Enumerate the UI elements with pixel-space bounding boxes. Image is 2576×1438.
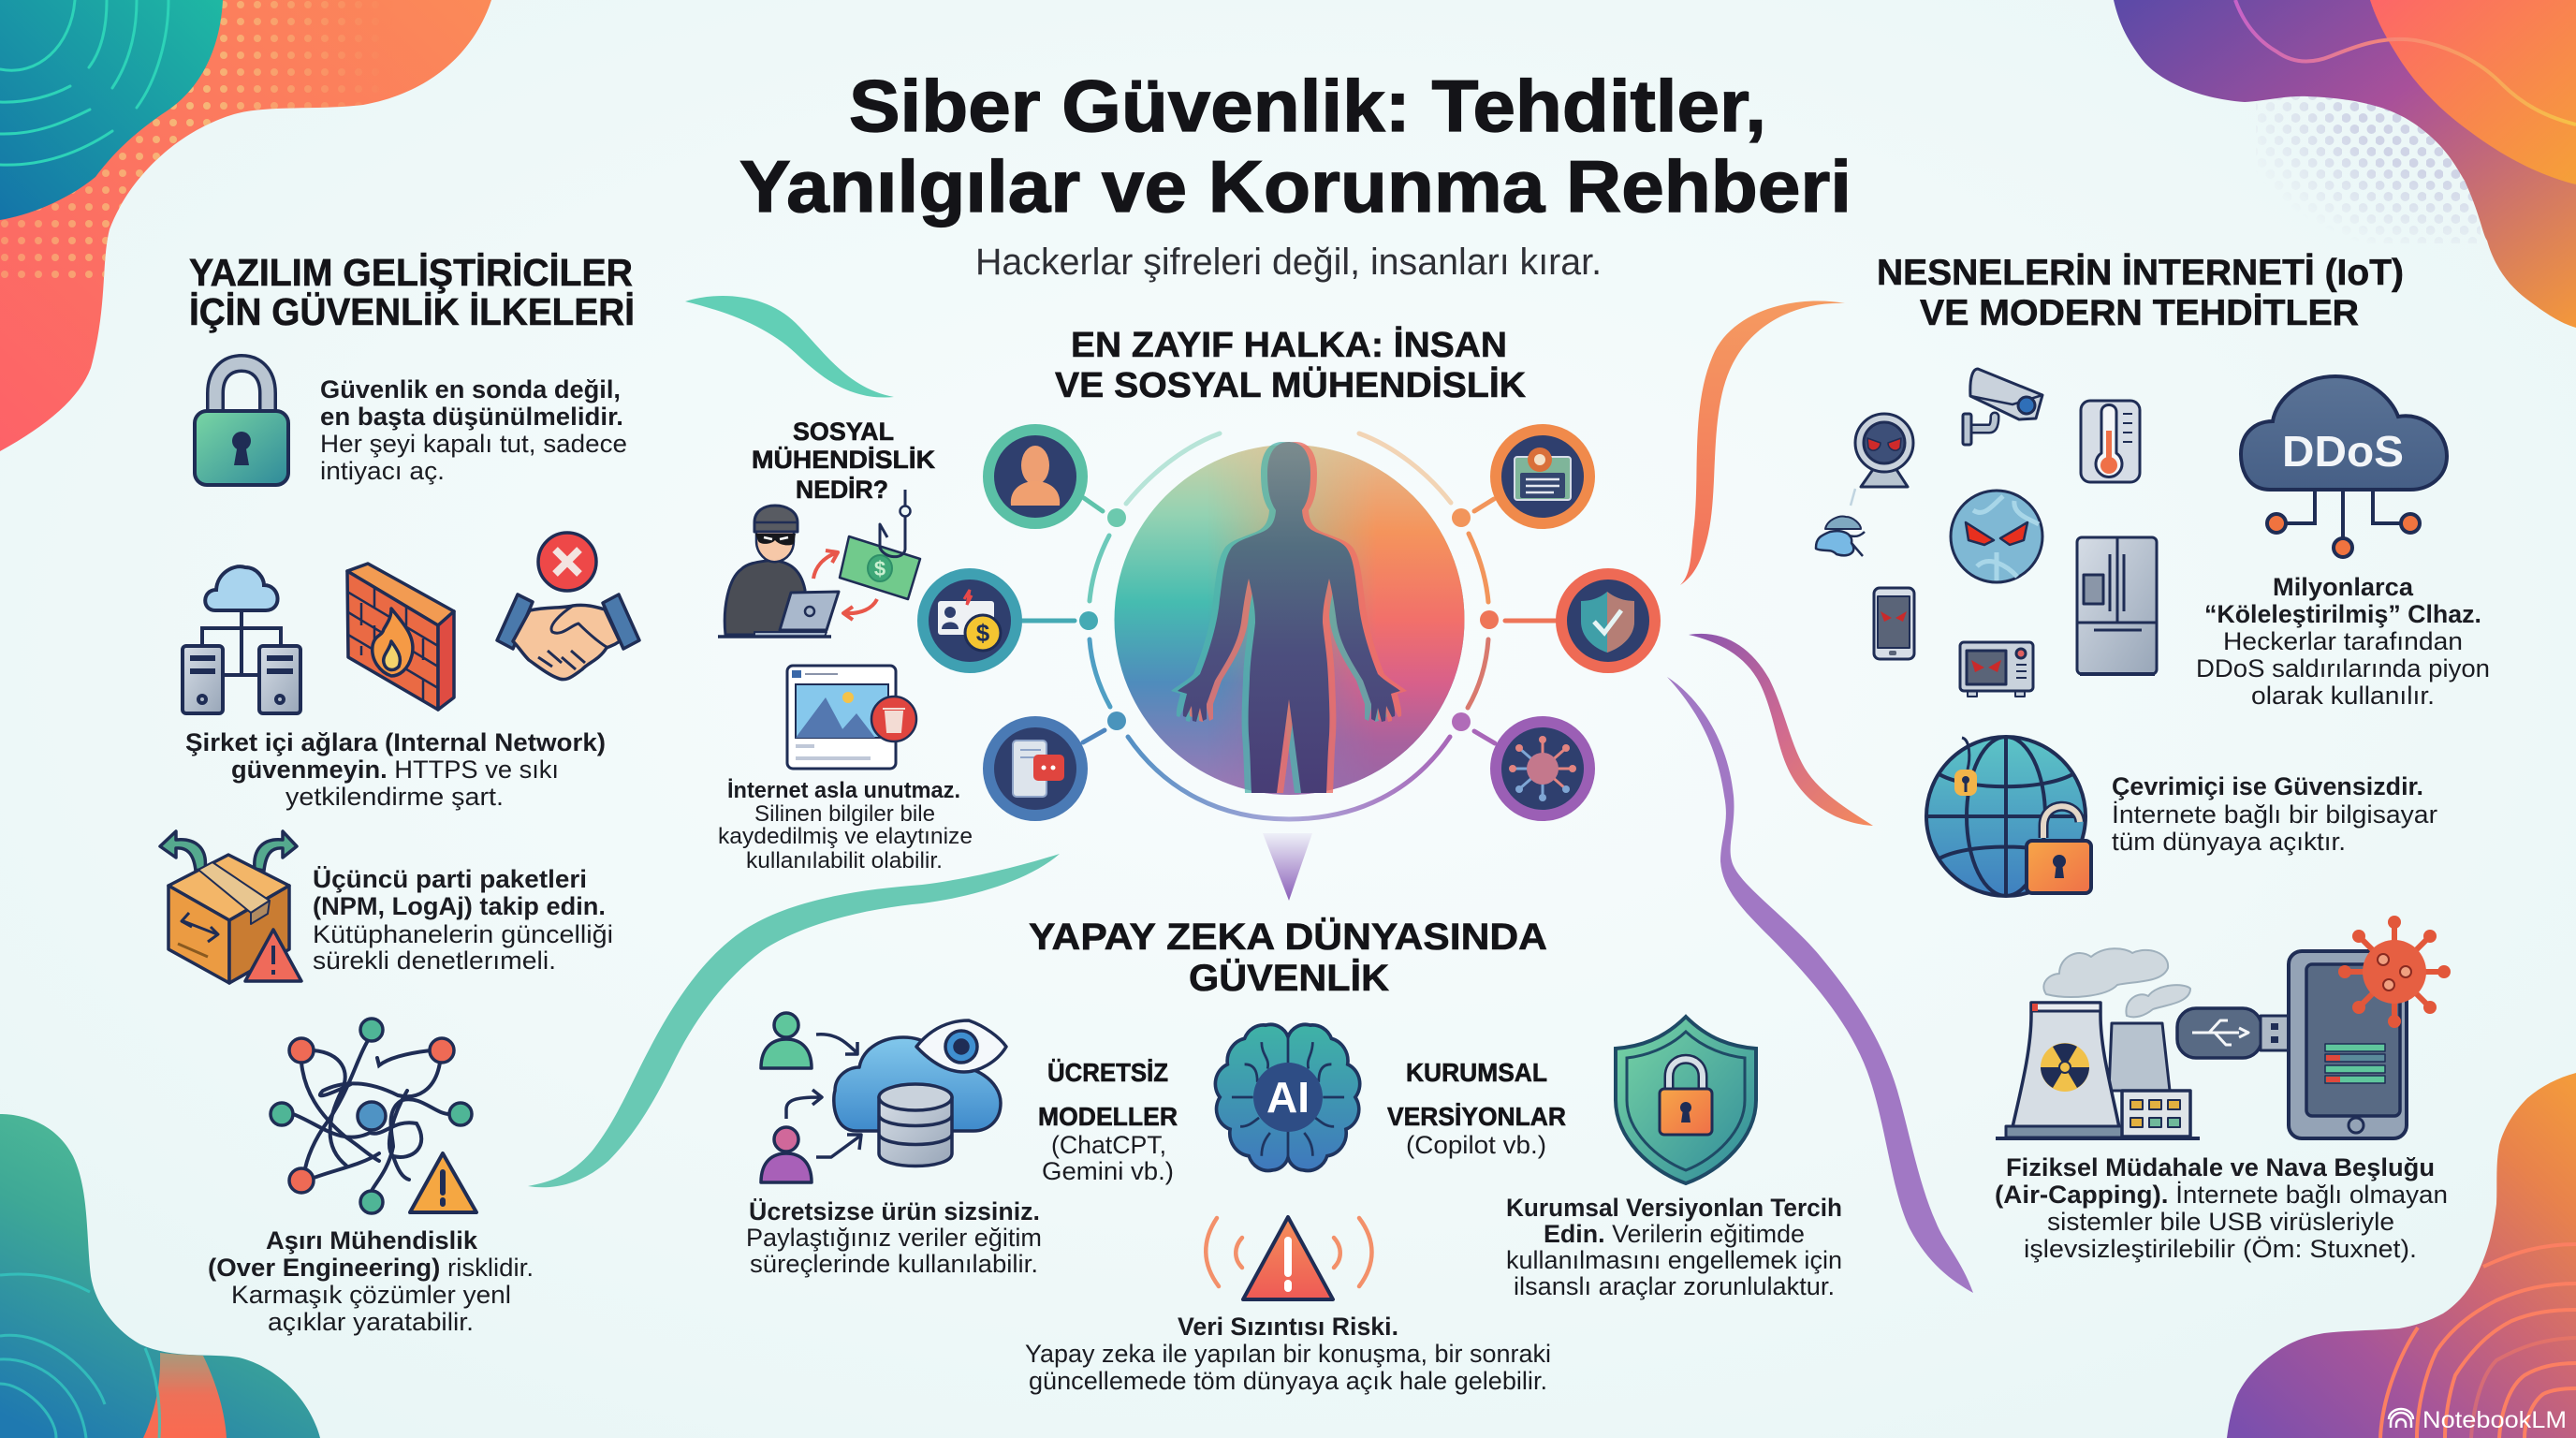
text: internal network: Şirket içi ağlara (Internal Network): [185, 728, 606, 756]
heading: developers: YAZILIM GELİŞTİRİCİLER: [189, 251, 633, 294]
flow ribbon: purple long: [1667, 677, 1973, 1293]
text: internet never forgets: İnternet asla unutmaz.: [727, 778, 960, 803]
heading: what is social engineering: [752, 418, 936, 504]
icon: shield check: [1561, 574, 1655, 668]
text: over engineering: [208, 1226, 534, 1336]
label: free models: [1038, 1058, 1178, 1185]
icon: id card and coin: $: [976, 619, 990, 647]
text: data leak risk: Veri Sızıntısı Riski.: [1178, 1313, 1398, 1341]
flow ribbon: purple to orange: [1689, 634, 1873, 826]
panel: developer security principles: [160, 251, 639, 1336]
text: free means you are the product: Ücretsizse ürün sizsiniz.: [749, 1197, 1040, 1225]
label: free models: (ChatCPT,: [1051, 1131, 1166, 1159]
icon: firewall: [347, 564, 454, 710]
panel: IoT and modern threats: [1816, 253, 2490, 1263]
panel: AI security: [746, 916, 1842, 1395]
icon: DDoS cloud: [2241, 376, 2447, 557]
text: over engineering: açıklar yaratabilir.: [268, 1308, 474, 1336]
ring around central figure: [1090, 433, 1488, 819]
text: online means insecure: İnternete bağlı bir bilgisayar: [2112, 800, 2437, 829]
text: free means you are the product: Paylaştığınız veriler eğitim: [746, 1224, 1042, 1252]
icon: broken trust handshake: [497, 533, 639, 680]
broken cloud: [1816, 489, 1865, 556]
title: Siber Güvenlik: Tehditler,: [849, 65, 1766, 147]
text: data leak risk: güncellemede töm dünyaya açık hale gelebilir.: [1029, 1367, 1547, 1395]
flow ribbon: teal bottom: [528, 854, 1060, 1187]
icon: user badge: [988, 430, 1082, 523]
heading: IoT: [1877, 253, 2404, 333]
corner blob: bottom right: [2227, 1073, 2576, 1438]
text: prefer enterprise versions: kullanılmasını engellemek için: [1506, 1246, 1842, 1274]
text: enslaved devices: “Köleleştirilmiş” Clhaz.: [2204, 600, 2481, 628]
icon: users, cloud data and eye: [761, 1013, 1006, 1182]
text: internal network: [185, 728, 606, 811]
subtitle: Hackerlar şifreleri değil, insanları kırar.: [975, 242, 1602, 283]
heading: weakest link: VE SOSYAL MÜHENDİSLİK: [1055, 365, 1527, 405]
heading: what is social engineering: MÜHENDİSLİK: [752, 446, 936, 474]
text: prefer enterprise versions: ilsanslı araçlar zorunlulaktur.: [1514, 1272, 1835, 1300]
text: internal network: yetkilendirme şart.: [285, 783, 504, 811]
text: internet never forgets: Silinen bilgiler bile: [754, 801, 935, 827]
heading: AI security: [1029, 916, 1547, 999]
central figure: human in gradient circle: [1114, 442, 1464, 795]
NotebookLM logo: NotebookLM: [2422, 1407, 2567, 1433]
text: online means insecure: [2112, 772, 2437, 856]
icon: id card and coin: [923, 574, 1017, 668]
icon: identity document: [1496, 430, 1589, 523]
thermostat: [2081, 401, 2140, 482]
flow ribbon: orange: [1680, 301, 1845, 585]
text: shift left security: intiyacı aç.: [320, 457, 445, 485]
label: free models: MODELLER: [1038, 1102, 1178, 1131]
text: enslaved devices: DDoS saldırılarında piyon: [2196, 654, 2490, 682]
panel: weakest link human: [718, 326, 1655, 901]
text: internet never forgets: [718, 778, 973, 873]
text: air gap: işlevsizleştirilebilir (Öm: Stuxnet).: [2024, 1235, 2417, 1263]
text: internet never forgets: kaydedilmiş ve elaytınize: [718, 824, 973, 849]
icon: AI brain: AI: [1266, 1073, 1310, 1122]
icon: nuclear plant, USB and infected device: [1996, 916, 2451, 1138]
text: air gap: [1995, 1153, 2448, 1263]
text: data leak risk: Yapay zeka ile yapılan bir konuşma, bir sonraki: [1025, 1340, 1551, 1368]
heading: AI security: GÜVENLİK: [1189, 957, 1389, 999]
label: free models: ÜCRETSİZ: [1047, 1058, 1168, 1087]
text: free means you are the product: süreçlerinde kullanılabilir.: [750, 1250, 1038, 1278]
text: shift left security: [320, 375, 627, 485]
text: air gap: sistemler bile USB virüsleriyle: [2047, 1208, 2394, 1236]
infected microwave: [1960, 642, 2033, 697]
text: data leak risk: [1025, 1313, 1551, 1395]
text: internet never forgets: kullanılabilit olabilir.: [746, 848, 943, 873]
corner blob: top left: [0, 0, 491, 451]
label: free models: Gemini vb.): [1042, 1157, 1174, 1185]
icon: data leak warning: [1206, 1217, 1372, 1299]
heading: IoT: VE MODERN TEHDİTLER: [1920, 293, 2359, 333]
infected phone: [1874, 588, 1914, 659]
icon: virus badge: [1496, 722, 1589, 815]
text: over engineering: Karmaşık çözümler yenl: [231, 1281, 511, 1309]
text: shift left security: Her şeyi kapalı tut, sadece: [320, 430, 627, 458]
arrow pointing to AI section: [1263, 833, 1312, 901]
title: [739, 65, 1852, 227]
heading: AI security: YAPAY ZEKA DÜNYASINDA: [1029, 916, 1547, 958]
text: third party packages: (NPM, LogAj) takip edin.: [313, 892, 606, 920]
evil globe: [1951, 491, 2042, 582]
heading: IoT: NESNELERİN İNTERNETİ (IoT): [1877, 253, 2404, 293]
text: enslaved devices: Heckerlar tarafından: [2223, 627, 2463, 655]
heading: what is social engineering: NEDİR?: [796, 476, 888, 504]
text: prefer enterprise versions: Kurumsal Versiyonlan Tercih: [1506, 1194, 1842, 1222]
text: free means you are the product: [746, 1197, 1042, 1278]
heading: what is social engineering: SOSYAL: [793, 418, 894, 446]
text: enslaved devices: [2196, 573, 2490, 710]
title: Yanılgılar ve Korunma Rehberi: [739, 145, 1852, 227]
text: enslaved devices: Milyonlarca: [2273, 573, 2414, 601]
text: internal network: güvenmeyin. HTTPS ve sıkı: [231, 756, 559, 784]
icon: hacked IoT devices: [1816, 369, 2157, 697]
icon: cloud and servers: [183, 566, 300, 713]
icon: hacker phishing with money: $: [874, 557, 886, 580]
text: third party packages: [313, 865, 613, 975]
text: shift left security: en başta düşünülmelidir.: [320, 403, 623, 431]
webcam: [1855, 414, 1913, 487]
corner blob: top right: [2114, 0, 2576, 328]
icon: globe with open padlock: [1926, 737, 2091, 896]
text: online means insecure: tüm dünyaya açıktır.: [2112, 828, 2346, 856]
heading: developers: [189, 251, 635, 333]
icon: shield with padlock: [1616, 1017, 1756, 1183]
text: over engineering: (Over Engineering) risklidir.: [208, 1254, 534, 1282]
text: online means insecure: Çevrimiçi ise Güvensizdir.: [2112, 772, 2423, 800]
text: air gap: Fiziksel Müdahale ve Nava Beşluğu: [2006, 1153, 2435, 1181]
icon: social post with trash: [787, 666, 916, 769]
text: prefer enterprise versions: Edin. Verilerin eğitimde: [1544, 1220, 1805, 1248]
heading: developers: İÇİN GÜVENLİK İLKELERİ: [189, 290, 635, 333]
label: enterprise versions: VERSİYONLAR: [1387, 1102, 1566, 1131]
icon: package with warning: [160, 831, 301, 983]
icon: phone message: [988, 722, 1082, 815]
text: shift left security: Güvenlik en sonda değil,: [320, 375, 621, 404]
icon: tangled network with warning: [271, 1019, 476, 1213]
corner blob: bottom left: [0, 1114, 320, 1438]
heading: weakest link: EN ZAYIF HALKA: İNSAN: [1071, 326, 1507, 365]
text: over engineering: Aşırı Mühendislik: [266, 1226, 478, 1255]
smart fridge: [2077, 537, 2157, 674]
icon: DDoS cloud: DDoS: [2282, 427, 2404, 476]
text: air gap: (Air-Capping). İnternete bağlı olmayan: [1995, 1180, 2448, 1209]
flow ribbon: teal top: [685, 296, 894, 397]
text: third party packages: sürekli denetlerımeli.: [313, 946, 556, 975]
heading: weakest link: [1055, 326, 1527, 405]
label: enterprise versions: [1387, 1058, 1566, 1159]
security camera: [1963, 369, 2042, 445]
text: prefer enterprise versions: [1506, 1194, 1842, 1300]
label: enterprise versions: (Copilot vb.): [1406, 1131, 1546, 1159]
label: enterprise versions: KURUMSAL: [1406, 1058, 1547, 1087]
text: third party packages: Kütüphanelerin güncelliği: [313, 920, 613, 948]
connector nodes: [1022, 498, 1558, 743]
text: third party packages: Üçüncü parti paketleri: [313, 865, 587, 893]
icon: green padlock: [195, 363, 288, 485]
text: enslaved devices: olarak kullanılır.: [2251, 682, 2435, 710]
halftone dots: [2256, 94, 2481, 243]
icon: AI brain: [1215, 1024, 1360, 1170]
icon: hacker phishing with money: [718, 490, 920, 637]
